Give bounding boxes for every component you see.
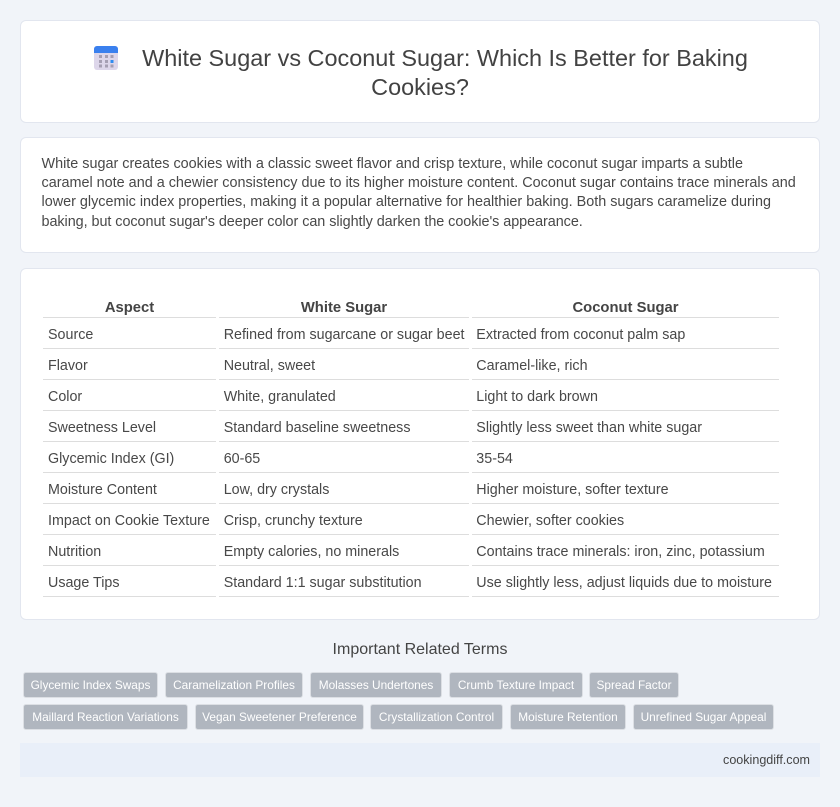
comparison table: White, granulated: [224, 389, 336, 405]
related term tags: Vegan Sweetener Preference: [202, 710, 357, 724]
related term tags: Spread Factor: [596, 678, 672, 692]
comparison table: Light to dark brown: [476, 389, 598, 405]
text: White Sugar vs Coconut Sugar: Which Is Better for Baking: [142, 45, 748, 71]
comparison table: Extracted from coconut palm sap: [476, 327, 685, 343]
comparison table: Low, dry crystals: [224, 482, 329, 498]
intro text: White sugar creates cookies with a classic sweet flavor and crisp texture, while coconut sugar imparts a subtle: [42, 156, 743, 172]
comparison table: Slightly less sweet than white sugar: [476, 420, 702, 436]
intro text: caramel note and a chewier consistency due to its higher moisture content. Coconut sugar contains trace minerals and: [42, 175, 796, 191]
header card: [20, 20, 820, 123]
comparison table: Use slightly less, adjust liquids due to moisture: [476, 575, 772, 591]
text: Cookies?: [371, 74, 469, 100]
related term tags: Crystallization Control: [379, 710, 494, 724]
footer source text: cookingdiff.com: [723, 753, 810, 767]
related term tags: Glycemic Index Swaps: [31, 678, 150, 692]
comparison table: Impact on Cookie Texture: [48, 513, 210, 529]
intro text: [42, 156, 796, 230]
comparison table: Standard baseline sweetness: [224, 420, 410, 436]
comparison table: Refined from sugarcane or sugar beet: [224, 327, 464, 343]
related term tags: Caramelization Profiles: [173, 678, 295, 692]
related term tags: [23, 672, 774, 730]
comparison table: Neutral, sweet: [224, 358, 315, 374]
footer bar: [20, 743, 820, 777]
comparison table: Source: [48, 327, 93, 343]
title: [142, 45, 748, 100]
comparison table: Coconut Sugar: [572, 300, 679, 316]
comparison table: Flavor: [48, 358, 88, 374]
comparison table: Caramel-like, rich: [476, 358, 588, 374]
comparison table: Aspect: [105, 300, 154, 316]
comparison table: Sweetness Level: [48, 420, 156, 436]
comparison table: Usage Tips: [48, 575, 120, 591]
comparison table: Higher moisture, softer texture: [476, 482, 669, 498]
comparison table: Crisp, crunchy texture: [224, 513, 363, 529]
comparison table: Glycemic Index (GI): [48, 451, 174, 467]
comparison table: Standard 1:1 sugar substitution: [224, 575, 422, 591]
table panel: [20, 268, 820, 620]
related term tags: Crumb Texture Impact: [458, 678, 574, 692]
comparison table: 35-54: [476, 451, 513, 467]
related terms heading: Important Related Terms: [333, 641, 507, 658]
intro text: lower glycemic index properties, making it a popular alternative for healthier baking. Both sugars caramelize during: [42, 194, 771, 210]
comparison table: Moisture Content: [48, 482, 157, 498]
icon: calendar grid: [94, 46, 118, 70]
comparison table: 60-65: [224, 451, 260, 467]
related term tags: Moisture Retention: [518, 710, 618, 724]
intro text: baking, but coconut sugar's deeper color can slightly darken the cookie's appearance.: [42, 214, 583, 230]
comparison table: Contains trace minerals: iron, zinc, potassium: [476, 544, 765, 560]
related term tags: Maillard Reaction Variations: [32, 710, 179, 724]
comparison table: [43, 300, 779, 597]
intro panel: [20, 137, 820, 253]
comparison table: Empty calories, no minerals: [224, 544, 399, 560]
comparison table: Color: [48, 389, 82, 405]
comparison table: White Sugar: [301, 300, 387, 316]
comparison table: Chewier, softer cookies: [476, 513, 624, 529]
related term tags: Unrefined Sugar Appeal: [641, 710, 766, 724]
comparison table: Nutrition: [48, 544, 101, 560]
related term tags: Molasses Undertones: [319, 678, 433, 692]
